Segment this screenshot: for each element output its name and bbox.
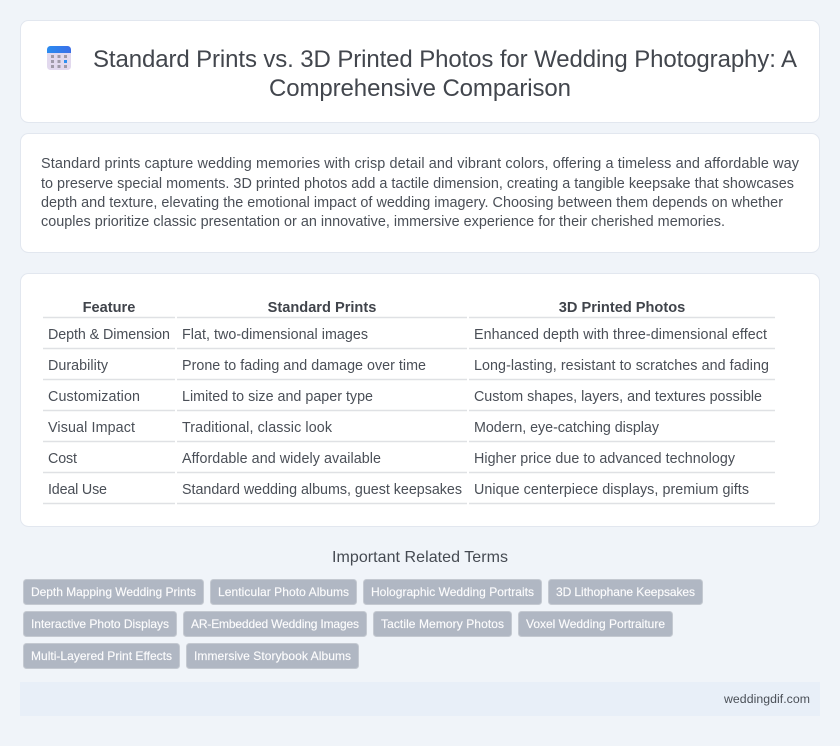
row: durability: Durability [48,358,109,374]
row: ideal use [48,482,749,498]
row: visual impact: Traditional, classic look [182,420,333,436]
row: visual impact: Modern, eye-catching display [474,420,660,436]
panel: comparison table [20,274,820,526]
text block: intro paragraph: Standard prints capture wedding memories with crisp detail and vibrant colors, offering a timeless and affordable way [41,156,800,172]
tag group: related terms: Immersive Storybook Albums [194,649,351,663]
row: ideal use: Unique centerpiece displays, premium gifts [474,482,749,498]
tag group: related terms [24,580,702,668]
tag group: related terms: Interactive Photo Displays [31,617,169,631]
tag group: related terms: Multi-Layered Print Effects [31,649,172,663]
tag group: related terms: 3D Lithophane Keepsakes [556,585,695,599]
tag group: related terms: AR-Embedded Wedding Images [191,617,359,631]
title [93,46,797,102]
row: cost: Higher price due to advanced technology [474,451,736,467]
table header row: Feature [83,300,135,316]
tag group: related terms: Tactile Memory Photos [381,617,504,631]
row: visual impact: Visual Impact [48,420,135,436]
table header row: 3D Printed Photos [559,300,685,316]
row: visual impact [48,420,660,436]
icon: calendar [47,46,71,70]
row: cost [48,451,736,467]
tag group: related terms: Holographic Wedding Portraits [371,585,534,599]
text block: intro paragraph: couples prioritize classic presentation or an innovative, immersive experience for their cherished memories. [41,214,725,230]
table header row: Standard Prints [268,300,376,316]
title: Standard Prints vs. 3D Printed Photos for Wedding Photography: A [93,46,797,73]
title: Comprehensive Comparison [269,75,571,102]
row: depth and dimension [48,327,767,343]
row: depth and dimension: Depth & Dimension [48,327,170,343]
row: durability [48,358,769,374]
tag group: related terms: Depth Mapping Wedding Prints [31,585,196,599]
table header row [83,300,685,316]
row: customization: Customization [48,389,140,405]
row: cost: Affordable and widely available [182,451,381,467]
row: customization: Custom shapes, layers, and textures possible [474,389,762,405]
row: depth and dimension: Flat, two-dimensional images [182,327,368,343]
panel: introduction [20,134,820,252]
row: ideal use: Ideal Use [48,482,107,498]
row: ideal use: Standard wedding albums, guest keepsakes [182,482,462,498]
text block: intro paragraph [41,156,800,230]
row: durability: Prone to fading and damage over time [182,358,426,374]
text block: intro paragraph: to preserve special moments. 3D printed photos add a tactile dimension, creating a tangible keepsake that showcases [41,176,794,192]
tag group: related terms: Lenticular Photo Albums [218,585,349,599]
row: cost: Cost [48,451,77,467]
tag group: related terms: Voxel Wedding Portraiture [526,617,665,631]
row: customization [48,389,762,405]
footer: weddingdif.com [723,692,810,706]
panel: title header [20,20,820,122]
text block: intro paragraph: depth and texture, elevating the emotional impact of wedding imagery. Choosing between them depends on whether [41,195,783,211]
row: durability: Long-lasting, resistant to scratches and fading [474,358,769,374]
row: customization: Limited to size and paper type [182,389,373,405]
footer [20,682,820,716]
heading: related terms: Important Related Terms [332,549,508,566]
row: depth and dimension: Enhanced depth with three-dimensional effect [474,327,767,343]
